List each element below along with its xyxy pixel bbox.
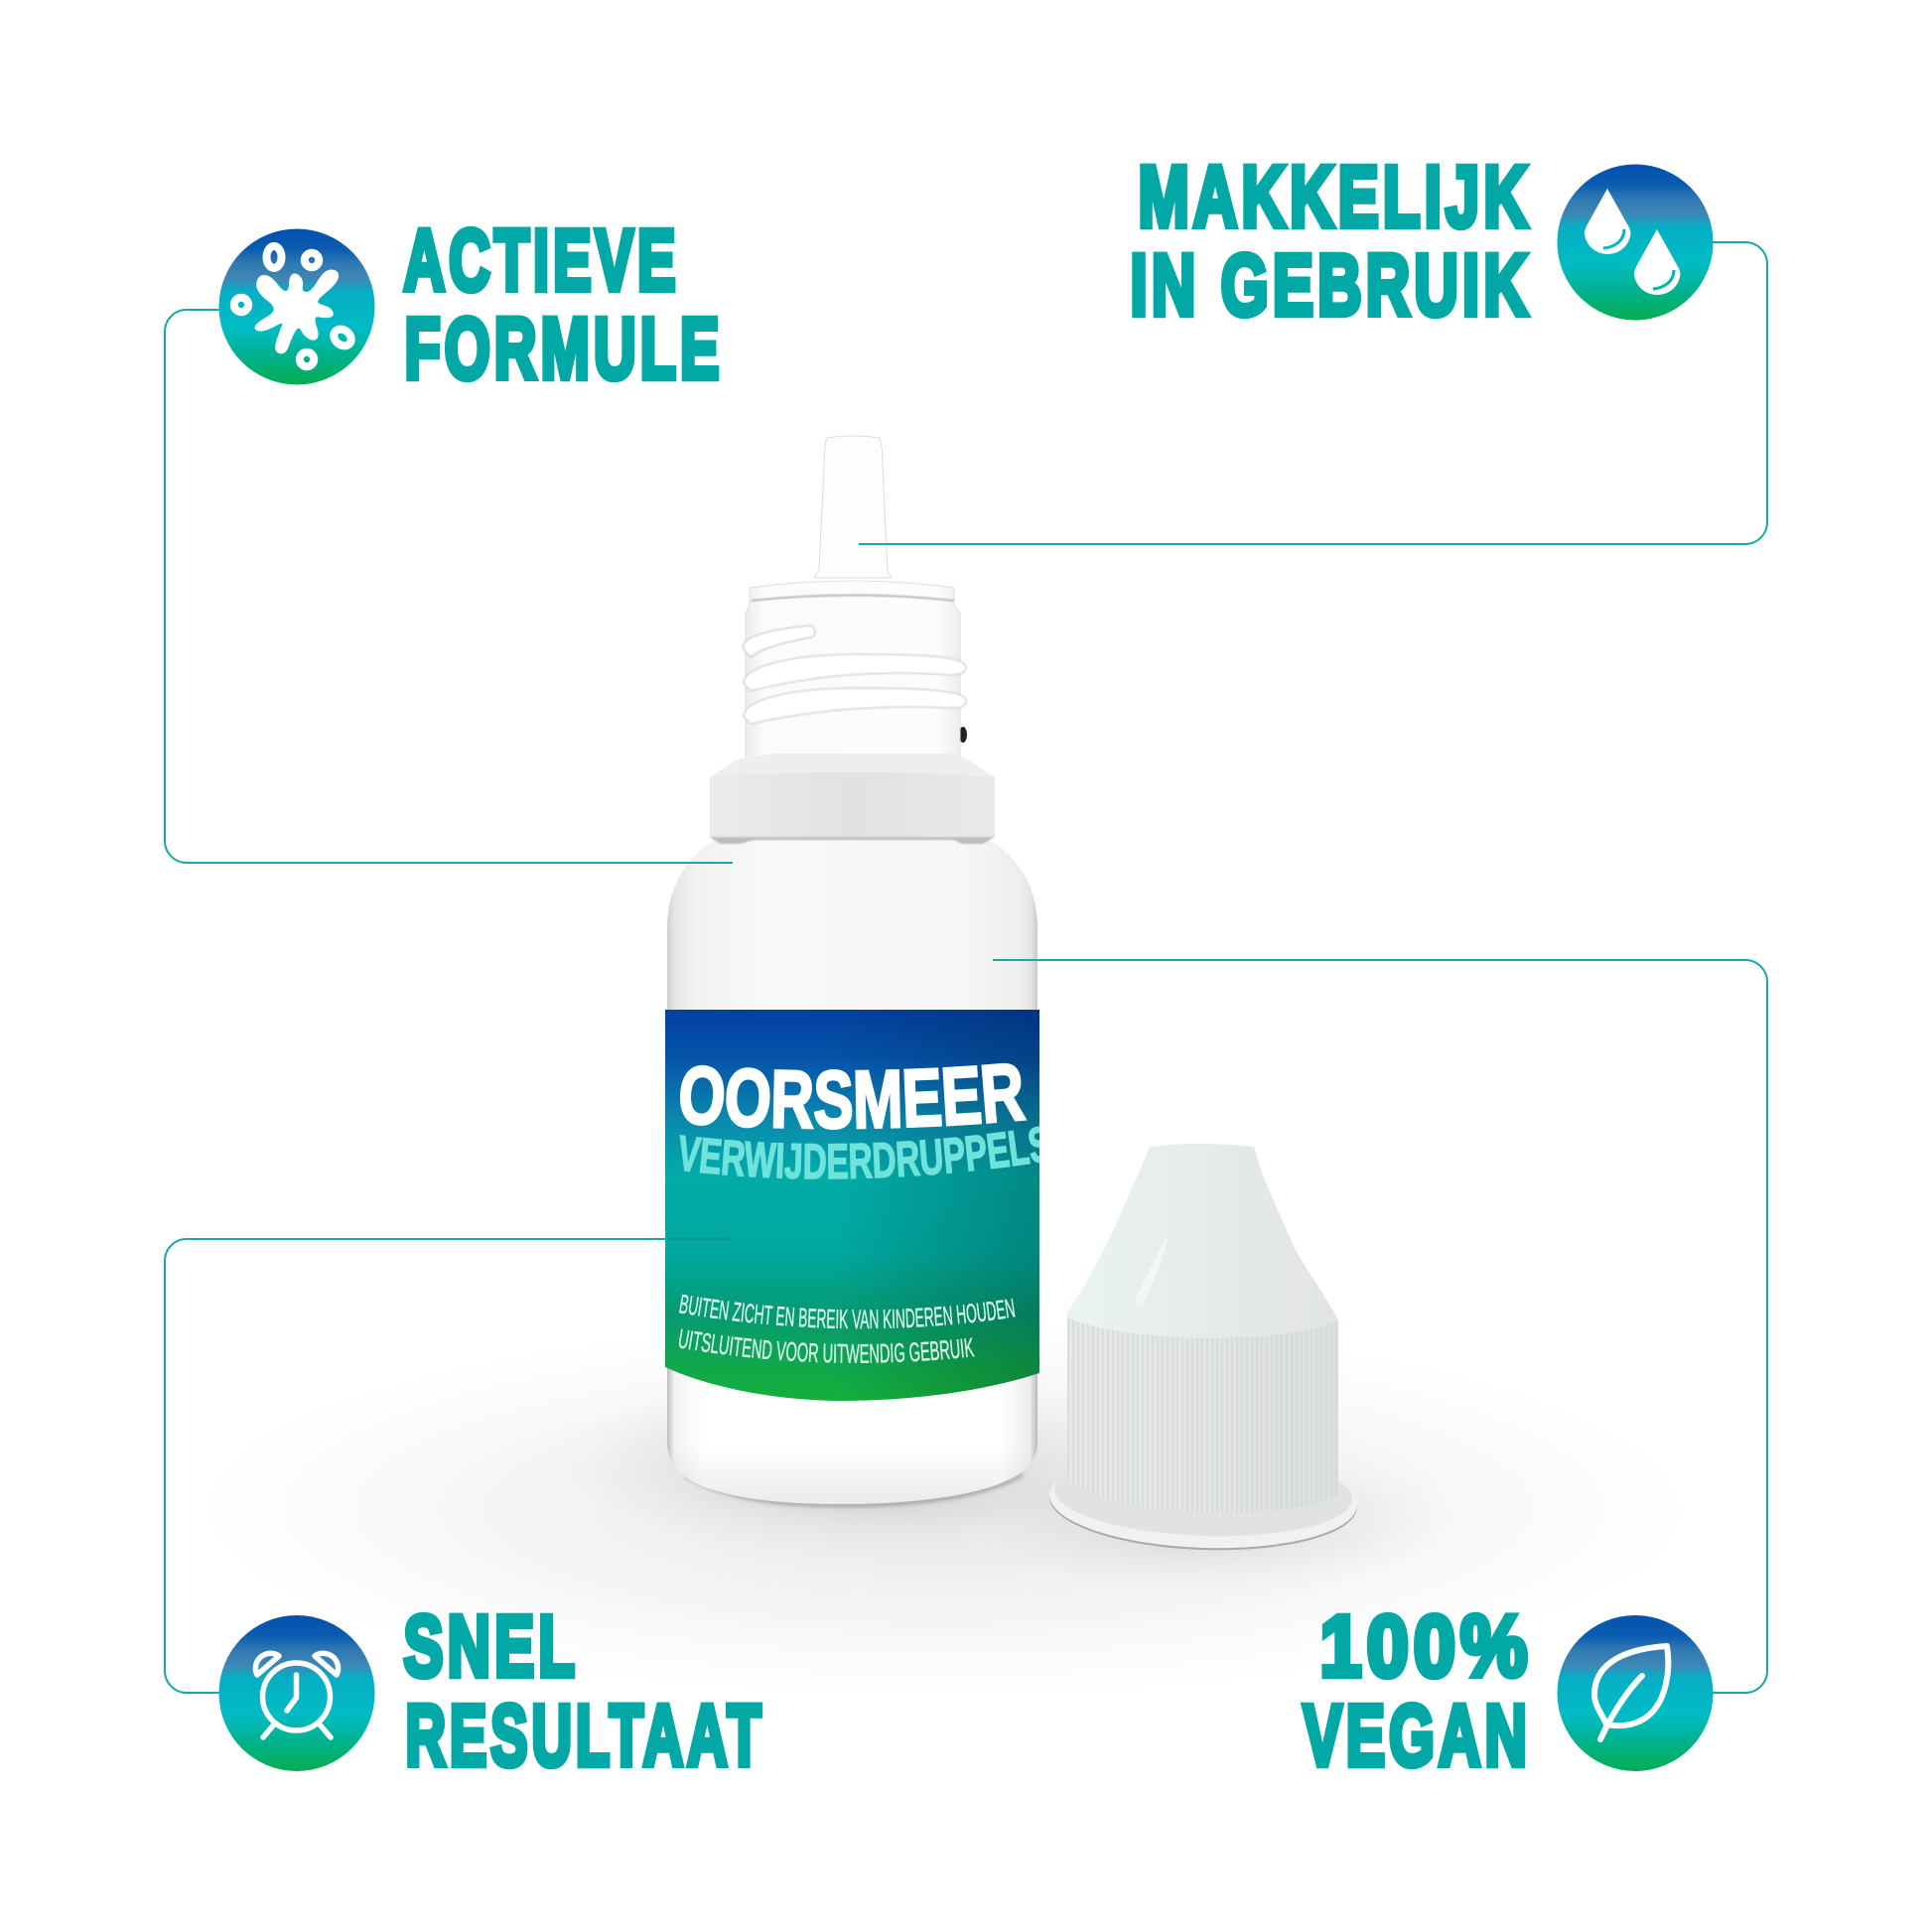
bottle body [667, 839, 1037, 1504]
feature: 100% vegan [1303, 1598, 1714, 1784]
heading: 100% vegan [1303, 1598, 1533, 1784]
heading: makkelijk in gebruik: MAKKELIJK [1138, 149, 1532, 245]
collar [710, 754, 995, 844]
heading: snel resultaat: SNEL [403, 1598, 579, 1695]
cap knurled body [1067, 1317, 1338, 1513]
connector stub over label [667, 1238, 729, 1240]
heading: 100% vegan: VEGAN [1303, 1688, 1531, 1784]
feature: actieve formule [218, 212, 723, 397]
heading: makkelijk in gebruik [1130, 149, 1532, 334]
feature: makkelijk in gebruik [1130, 149, 1714, 334]
icon: splash [218, 228, 375, 385]
threaded neck [743, 581, 966, 759]
label subtitle: VERWIJDERDRUPPELS [679, 1126, 1039, 1179]
label [665, 1010, 1039, 1401]
bottle base [667, 1360, 1037, 1504]
heading: actieve formule: FORMULE [405, 301, 723, 397]
icon: drops [1557, 165, 1714, 320]
bottle neck speck [959, 727, 967, 743]
icon: alarm clock [218, 1615, 375, 1771]
floor shadow [189, 1320, 1698, 1698]
dropper bottle [665, 435, 1039, 1504]
heading: actieve formule: ACTIEVE [403, 212, 679, 309]
connector line: snel resultaat [165, 1239, 667, 1693]
connector line: 100% vegan [993, 960, 1767, 1693]
heading: makkelijk in gebruik: IN GEBRUIK [1130, 237, 1532, 334]
cap cone [1067, 1144, 1338, 1390]
label warning line 2: UITSLUITEND VOOR UITWENDIG GEBRUIK [679, 1328, 975, 1363]
heading: snel resultaat [403, 1598, 764, 1784]
connector line: makkelijk in gebruik [859, 242, 1767, 544]
heading: actieve formule [403, 212, 723, 397]
heading: snel resultaat: RESULTAAT [405, 1688, 764, 1784]
label warning line 1: BUITEN ZICHT EN BEREIK VAN KINDEREN HOUDEN [679, 1295, 1015, 1328]
connector line: actieve formule [165, 310, 733, 863]
dropper tip [814, 436, 892, 578]
cap flange [1047, 1448, 1359, 1555]
label title: OORSMEER [680, 1062, 1027, 1130]
feature: snel resultaat [218, 1598, 764, 1784]
icon: leaf [1557, 1615, 1714, 1771]
heading: 100% vegan: 100% [1320, 1598, 1533, 1695]
bottle cap [1047, 1144, 1359, 1555]
